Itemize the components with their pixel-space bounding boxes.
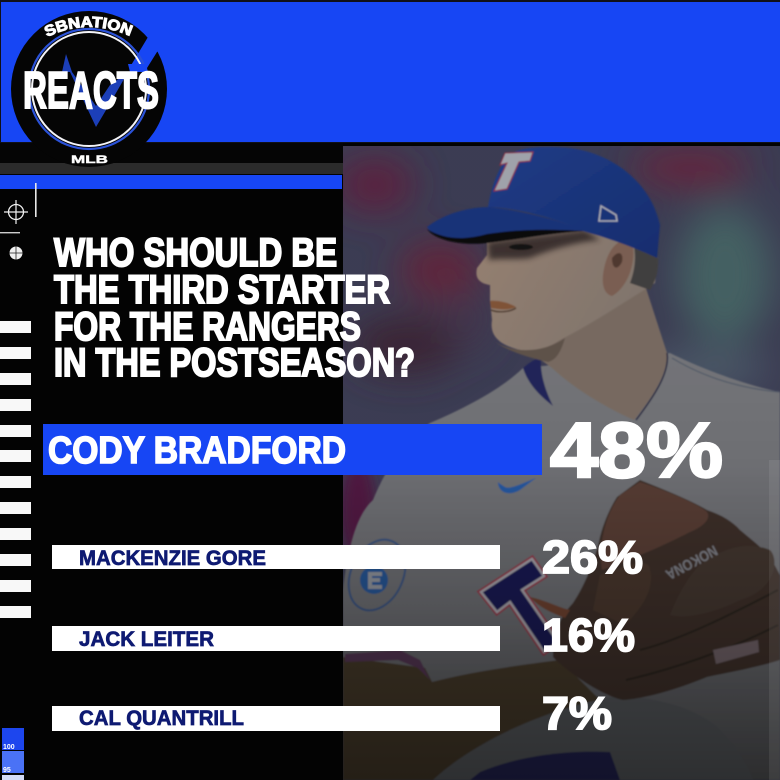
brim underside: [427, 229, 584, 244]
ear: [603, 240, 633, 296]
result: Cal Quantrill: CAL QUANTRILL: [79, 707, 244, 730]
left strips: [0, 143, 343, 189]
glove pocket: [594, 564, 650, 620]
result: Cal Quantrill: [52, 687, 612, 739]
result: Cody Bradford: 48%: [550, 406, 723, 494]
jersey T logo: [481, 559, 558, 652]
glove stitching: [626, 590, 778, 680]
scale squares: 95: [3, 767, 11, 774]
logo: SB Nation Reacts MLB: [11, 11, 167, 167]
logo ring: [29, 29, 149, 149]
shading: [343, 146, 780, 780]
cap logo T: [494, 152, 533, 191]
jersey: [343, 353, 780, 780]
scale squares: 100: [3, 744, 15, 751]
header band: [0, 0, 780, 143]
glove: [553, 480, 780, 700]
result: Mackenzie Gore: [52, 531, 643, 583]
logo reacts wordmark: REACTS: [23, 62, 159, 120]
nike swoosh: [498, 478, 536, 493]
thumb strap: [530, 597, 570, 618]
sleeve patch: [347, 538, 406, 612]
eye: [509, 244, 533, 250]
panel: player photo: [335, 146, 780, 780]
eye shadow: [487, 230, 600, 260]
glove finger: [760, 547, 775, 564]
icon: crosshair marks: [0, 183, 37, 260]
glove webbing: [601, 482, 708, 570]
hair: [630, 246, 658, 290]
shoulder seam: [672, 358, 780, 392]
cap brim: [427, 207, 584, 243]
sleeve trim: [345, 650, 430, 680]
result: Cody Bradford: [43, 406, 723, 494]
logo mlb: MLB: [71, 154, 108, 166]
title: [54, 231, 415, 385]
logo check gap: [128, 64, 148, 72]
collar: [523, 358, 553, 406]
photo details: [338, 147, 780, 780]
cap crown: [488, 147, 660, 258]
title: WHO SHOULD BE: [54, 231, 337, 275]
result: Jack Leiter: JACK LEITER: [79, 628, 214, 651]
right collar line: [636, 353, 667, 420]
glove brand: NOKONA: [663, 541, 720, 583]
title: IN THE POSTSEASON?: [54, 341, 415, 385]
face shadow under jaw: [495, 338, 565, 362]
right strip: [769, 460, 780, 780]
photo background blur: [335, 146, 780, 780]
title: FOR THE RANGERS: [54, 305, 361, 349]
lower jersey trim: [470, 752, 620, 780]
face: [476, 230, 658, 351]
result: Cal Quantrill: 7%: [542, 687, 612, 739]
forearm: [343, 657, 610, 780]
lips: [490, 301, 516, 309]
lower body jersey: [434, 700, 609, 780]
result: Cody Bradford: CODY BRADFORD: [48, 430, 346, 472]
glove flag patch: [713, 640, 759, 664]
scale squares: [2, 728, 24, 780]
new era mark: [599, 206, 617, 221]
logo: SB Nation Reacts MLB: SBNATION: [44, 16, 134, 36]
title: THE THIRD STARTER: [54, 268, 390, 312]
result: Jack Leiter: 16%: [542, 609, 635, 661]
neck: [542, 288, 668, 420]
result: Mackenzie Gore: MACKENZIE GORE: [79, 547, 266, 570]
logo notch: [130, 24, 172, 68]
logo arc text top: [47, 27, 132, 37]
result: Jack Leiter: [52, 609, 635, 661]
logo check mark: [62, 54, 128, 127]
ruler ticks: [0, 321, 31, 618]
result: Mackenzie Gore: 26%: [542, 531, 643, 583]
